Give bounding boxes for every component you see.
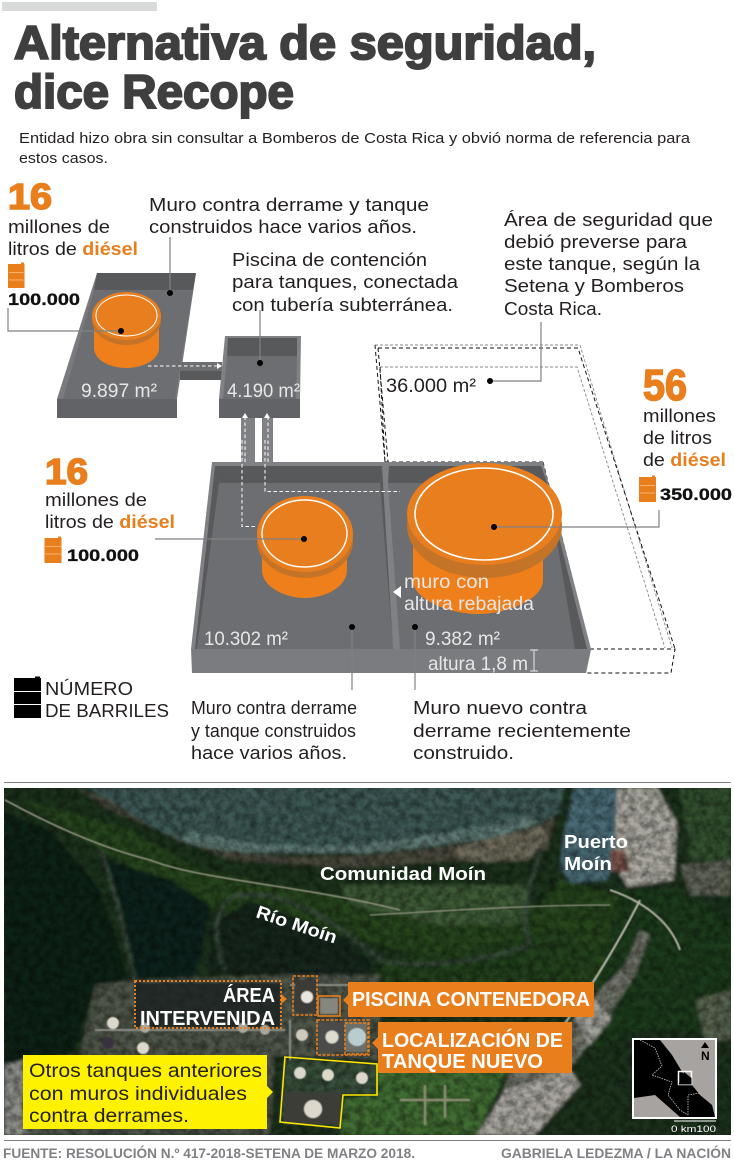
callout: piscina contenedora: PISCINA CONTENEDORA — [352, 989, 590, 1011]
annotation: new wall: Muro nuevo contra — [413, 698, 588, 718]
section labels: 10.302 m² — [204, 628, 288, 650]
stat: 16 million litres (lower tank): litros de diésel — [45, 512, 175, 532]
panel: diesel tank diagram — [8, 237, 675, 690]
callout: otros tanques — [23, 1055, 273, 1129]
stat: 56 million litres: de litros — [643, 428, 712, 448]
annotation: safety area: debió preverse para — [504, 232, 688, 252]
annotation: safety area: Área de seguridad que — [504, 210, 713, 230]
subtitle: estos casos. — [19, 150, 108, 167]
header accent bar — [2, 2, 157, 11]
author credit: GABRIELA LEDEZMA / LA NACIÓN — [501, 1146, 731, 1161]
orange outlines: new tank and pool — [293, 976, 369, 1055]
stat: 16 million litres (top tank): 16 — [8, 176, 52, 217]
stat: 16 million litres (top tank): 100.000 — [8, 291, 80, 309]
callout: otros tanques: contra derrames. — [29, 1105, 189, 1127]
icon: barrel — [44, 536, 62, 563]
subtitle — [19, 130, 691, 167]
callout: área intervenida: INTERVENIDA — [140, 1008, 275, 1030]
basin: 4.190 m2 containment pool: 4.190 m² — [227, 380, 300, 402]
annotation: old wall, lower tank — [191, 698, 357, 763]
callout: lowered wall — [393, 571, 534, 615]
basin: 9.897 m2 with tank: 9.897 m² — [81, 380, 157, 402]
stat: 16 million litres (top tank): millones de — [8, 217, 110, 237]
map texture — [4, 788, 731, 1135]
annotation: safety area — [504, 210, 713, 319]
panel: satellite map — [0, 780, 734, 1140]
stat: 16 million litres (lower tank): millones de — [45, 490, 147, 510]
callout: área intervenida — [135, 981, 287, 1030]
basin: 4.190 m2 containment pool — [219, 336, 301, 418]
subtitle: Entidad hizo obra sin consultar a Bomberos de Costa Rica y obvió norma de referencia para — [19, 130, 691, 147]
coast village and vegetation — [20, 800, 640, 1000]
area: 36.000 m2 dashed safety area — [375, 345, 675, 673]
callout: otros tanques: Otros tanques anteriores — [29, 1060, 262, 1082]
section labels: 9.382 m² — [425, 628, 500, 650]
callout: piscina contenedora — [343, 982, 594, 1017]
callout: localización de tanque nuevo: TANQUE NUEVO — [382, 1051, 543, 1073]
annotation: old wall, lower tank: hace varios años. — [191, 743, 347, 763]
dashed flow arrows — [148, 363, 400, 526]
annotation: safety area: Setena y Bomberos — [504, 276, 684, 296]
locator map: 0 km100 — [671, 1124, 716, 1135]
locator map: N — [701, 1049, 710, 1063]
map detail — [5, 800, 680, 1125]
callout: localización de tanque nuevo: LOCALIZACIÓN DE — [382, 1028, 563, 1052]
locator map — [633, 1039, 716, 1135]
orange tank right — [407, 463, 562, 614]
refinery grounds — [25, 975, 380, 1135]
map imagery — [0, 780, 734, 1140]
orange tank left — [257, 496, 353, 598]
title: dice Recope — [14, 65, 294, 118]
stat: 16 million litres (top tank): litros de diésel — [8, 239, 138, 259]
title — [14, 16, 596, 118]
source credit: FUENTE: RESOLUCIÓN N.º 417-2018-SETENA DE MARZO 2018. — [3, 1146, 415, 1161]
stat: 16 million litres (lower tank): 100.000 — [67, 547, 139, 565]
sea — [86, 788, 566, 847]
annotation: old wall, lower tank: y tanque construidos — [191, 721, 356, 741]
legend: number of barrels: NÚMERO — [45, 678, 133, 699]
title: Alternativa de seguridad, — [14, 16, 596, 69]
legend: number of barrels: DE BARRILES — [45, 701, 169, 721]
stat: 16 million litres (top tank) — [8, 176, 138, 309]
annotation: old wall, lower tank: Muro contra derrame — [191, 698, 357, 718]
green field — [340, 1064, 510, 1135]
icon: barrel — [8, 262, 24, 288]
main basin: two containment sections — [191, 462, 591, 675]
label: Río Moín: Río Moín — [254, 902, 340, 947]
annotation: containment pool: para tanques, conectada — [232, 272, 459, 292]
label: Puerto Moín: Puerto — [564, 832, 628, 852]
annotation: old wall and tank: construidos hace varios años. — [149, 217, 417, 237]
connecting pipes — [180, 362, 273, 464]
label: Puerto Moín — [565, 835, 628, 870]
stat: 56 million litres: de diésel — [643, 450, 726, 470]
dark jungle — [4, 812, 130, 1080]
stat: 56 million litres: 350.000 — [660, 486, 732, 504]
icon: black barrel — [14, 676, 41, 718]
label: Comunidad Moín: Comunidad Moín — [320, 864, 486, 884]
safety area value: 36.000 m² — [386, 375, 477, 397]
annotation: containment pool: Piscina de contención — [232, 250, 427, 270]
section labels — [204, 628, 538, 675]
callout: lowered wall: altura rebajada — [404, 593, 534, 615]
icon: barrel — [639, 476, 656, 502]
annotation: new wall — [413, 698, 631, 763]
annotation: old wall and tank — [149, 195, 429, 237]
callout: otros tanques: con muros individuales — [29, 1083, 247, 1105]
right side town — [680, 860, 731, 895]
orange tank — [92, 292, 161, 368]
stat: 56 million litres: 56 — [643, 361, 687, 410]
annotation: containment pool: con tubería subterránea. — [232, 295, 453, 315]
river — [100, 850, 540, 982]
annotation: new wall: construido. — [413, 743, 514, 763]
yellow outline: other tanks — [280, 1057, 377, 1128]
annotation: new wall: derrame recientemente — [413, 721, 631, 741]
annotation: containment pool — [232, 250, 459, 315]
section labels: altura 1,8 m — [428, 653, 528, 675]
basin: 9.897 m2 with tank — [57, 273, 196, 418]
beach — [76, 788, 555, 868]
callout: lowered wall: muro con — [404, 571, 489, 593]
callout: localización de tanque nuevo — [372, 1022, 572, 1073]
annotation: safety area: Costa Rica. — [504, 299, 602, 319]
label: Puerto Moín: Moín — [564, 854, 612, 874]
callout: área intervenida: ÁREA — [223, 984, 275, 1007]
highway and yards — [500, 930, 650, 1100]
leader lines and dots — [8, 237, 659, 690]
stat: 56 million litres — [639, 361, 732, 504]
port water and quay — [560, 788, 617, 883]
legend: number of barrels — [14, 676, 169, 721]
stat: 16 million litres (lower tank) — [44, 451, 175, 565]
annotation: old wall and tank: Muro contra derrame y tanque — [149, 195, 429, 215]
stat: 56 million litres: millones — [643, 406, 716, 426]
stat: 16 million litres (lower tank): 16 — [45, 451, 88, 492]
annotation: safety area: este tanque, según la — [504, 254, 701, 274]
